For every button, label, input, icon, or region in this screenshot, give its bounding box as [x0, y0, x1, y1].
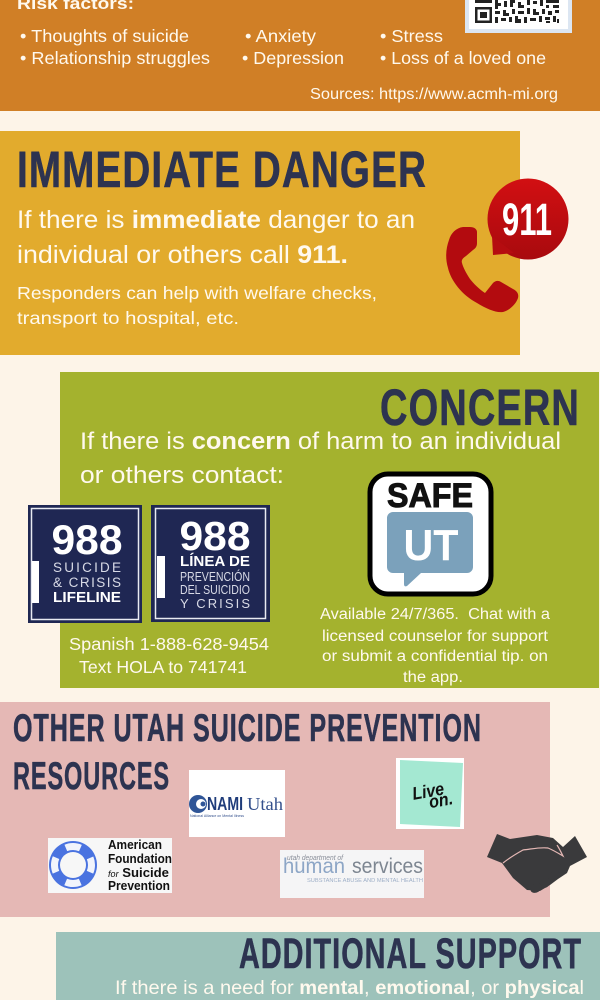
risk factor list	[20, 26, 546, 68]
logo: live on	[396, 758, 464, 829]
text: additional support: If there is a need for mental, emotional, or physical	[115, 977, 584, 999]
heading: immediate danger: IMMEDIATE DANGER	[17, 141, 427, 198]
icon: handshake	[487, 834, 587, 895]
panel: additional support	[56, 930, 600, 1000]
logo: 988 linea	[151, 505, 270, 622]
panel: other resources	[0, 702, 550, 917]
logo: live on: on.	[427, 788, 454, 812]
text: safe ut description: licensed counselor for support	[322, 628, 549, 645]
text: immediate danger call: If there is immediate danger to an	[17, 206, 415, 234]
logo: safe ut: UT	[404, 521, 459, 570]
risk factor list: • Anxiety	[245, 26, 316, 46]
logo: live on: Live	[411, 779, 446, 804]
logo: 988 linea: PREVENCIÓN	[180, 569, 250, 584]
text: concern line 1: If there is concern of harm to an individual	[80, 428, 561, 455]
logo: 988 linea: 988	[180, 513, 250, 559]
sources: Sources: https://www.acmh-mi.org	[310, 86, 558, 103]
heading: resources: RESOURCES	[13, 755, 170, 798]
icon: QR code	[465, 0, 572, 33]
risk factor list: • Depression	[242, 48, 344, 68]
panel: immediate danger	[0, 131, 520, 355]
logo: safe ut: SAFE	[387, 477, 473, 515]
text: safe ut description: Available 24/7/365. Chat with a	[320, 606, 550, 623]
risk factor list: • Relationship struggles	[20, 48, 210, 68]
logo: american foundation for suicide prevention: Foundation	[108, 851, 172, 866]
text: HOLA line: Text HOLA to 741741	[79, 657, 247, 677]
text: call 911: individual or others call 911.	[17, 241, 348, 269]
logo: NAMI Utah: National Alliance on Mental Illness	[190, 813, 244, 818]
logo: 988 lifeline: & CRISIS	[53, 575, 121, 590]
logo: american foundation for suicide prevention: Prevention	[108, 878, 170, 893]
logo: 988 linea: Y CRISIS	[180, 596, 250, 611]
icon: red phone with 911 bubble: 911	[502, 194, 552, 245]
risk factor list: • Stress	[380, 26, 443, 46]
risk factor list: • Thoughts of suicide	[20, 26, 189, 46]
logo: safe ut	[370, 474, 491, 594]
logo: american foundation for suicide prevention: for Suicide	[108, 865, 169, 880]
panel: concern	[60, 372, 599, 688]
logo: human services: human	[283, 855, 345, 878]
text: safe ut description: or submit a confidential tip. on	[322, 648, 548, 665]
logo: NAMI Utah	[189, 770, 285, 837]
text: responders: Responders can help with welfare checks,	[17, 283, 377, 303]
logo: 988 lifeline	[28, 505, 142, 623]
logo: NAMI Utah: NAMI	[207, 794, 243, 814]
text: safe ut description	[320, 606, 550, 686]
panel: risk factors	[0, 0, 600, 111]
logo: 988 linea: DEL SUICIDIO	[180, 582, 250, 597]
logo: human services: services	[352, 855, 423, 878]
logo: human services: utah department of	[287, 855, 344, 862]
text: transport: transport to hospital, etc.	[17, 308, 239, 328]
logo: american foundation for suicide prevention	[48, 837, 172, 893]
logo: human services	[280, 850, 424, 898]
text: safe ut description: the app.	[403, 669, 463, 686]
logo: 988 linea: LÍNEA DE	[180, 553, 250, 570]
logo: 988 lifeline: SUICIDE	[53, 560, 121, 575]
logo: american foundation for suicide prevention: American	[108, 837, 162, 852]
text: concern line 2: or others contact:	[80, 462, 284, 489]
logo: human services: SUBSTANCE ABUSE AND MENTAL HEALTH	[307, 878, 423, 884]
icon: red phone with 911 bubble	[446, 178, 568, 312]
logo: NAMI Utah: Utah	[247, 794, 283, 814]
risk factor list: • Loss of a loved one	[380, 48, 546, 68]
logo: 988 lifeline: LIFELINE	[53, 589, 121, 606]
logo: 988 lifeline: 988	[52, 516, 122, 563]
text: Spanish line: Spanish 1-888-628-9454	[69, 634, 269, 654]
